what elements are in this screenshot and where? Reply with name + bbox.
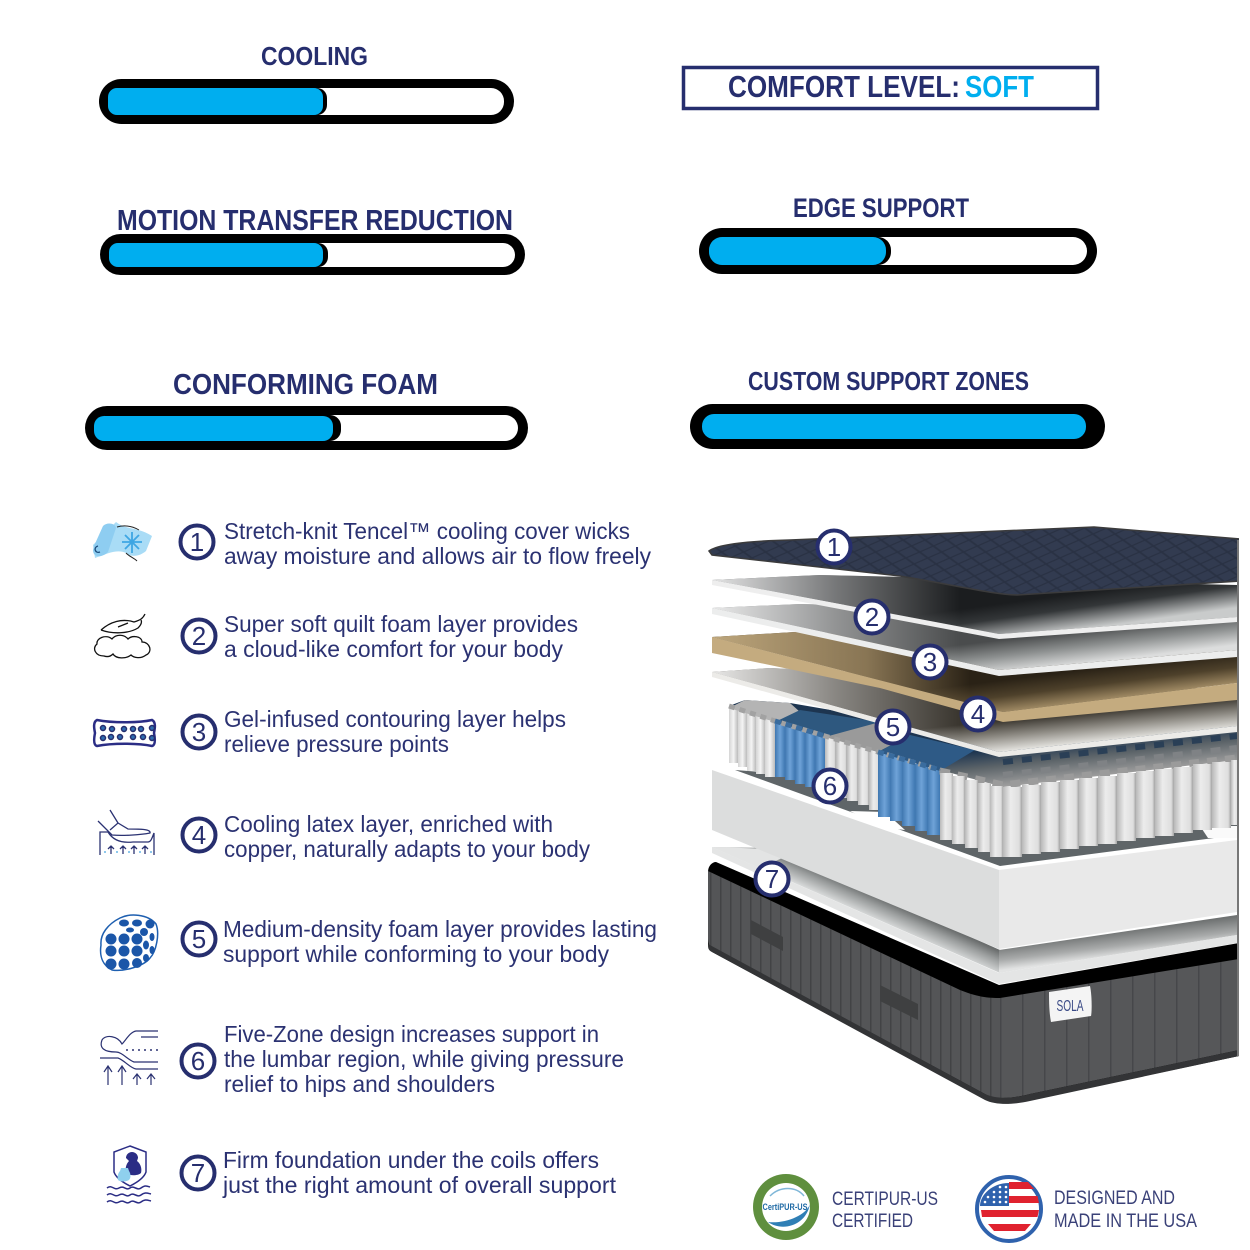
marker 2 [856, 600, 888, 634]
number 2 [182, 620, 216, 652]
comfort level label: COMFORT LEVEL: [728, 69, 960, 104]
comfort level value: SOFT [965, 69, 1034, 104]
coils: middle blue [878, 753, 940, 835]
number 5: 5 [192, 924, 206, 954]
icon: usa flag circle [977, 1177, 1041, 1241]
base layer [708, 862, 1239, 1104]
marker 7: 7 [765, 864, 779, 894]
text 1: away moisture and allows air to flow freely [224, 543, 651, 569]
text 4: copper, naturally adapts to your body [224, 836, 590, 862]
text 7: Firm foundation under the coils offers [223, 1147, 599, 1173]
text: certipur: CERTIPUR-US [832, 1189, 938, 1210]
layer 3 gel foam [712, 604, 1237, 676]
icon: gel foam [94, 720, 155, 746]
marker 5 [876, 710, 910, 744]
layer 7 foundation foam [712, 847, 1237, 984]
text: certipur [832, 1189, 938, 1232]
text 6: the lumbar region, while giving pressure [224, 1046, 624, 1072]
text 3: relieve pressure points [224, 731, 449, 757]
marker 7 [756, 862, 788, 896]
marker 3: 3 [923, 647, 937, 677]
marker 5: 5 [886, 712, 900, 742]
number 1: 1 [190, 527, 204, 557]
text 3 [224, 706, 566, 757]
marker 1: 1 [827, 532, 841, 562]
number 5 [182, 922, 216, 956]
text: usa: DESIGNED AND [1054, 1188, 1175, 1209]
badge: certipur-us [753, 1174, 938, 1240]
text 7: just the right amount of overall support [222, 1172, 617, 1198]
number 6 [182, 1044, 214, 1078]
feature 3 [94, 706, 566, 757]
text 5: support while conforming to your body [223, 941, 609, 967]
number 3: 3 [192, 717, 206, 747]
layer 6 base foam and pocket coils [712, 700, 1239, 949]
text 5: Medium-density foam layer provides lasting [223, 916, 657, 942]
marker 2: 2 [865, 602, 879, 632]
text 2 [224, 611, 578, 662]
text 2: Super soft quilt foam layer provides [224, 611, 578, 637]
marker 6 [814, 770, 846, 802]
feature 5 [101, 915, 657, 970]
text 4 [224, 811, 590, 862]
coils: left blue [775, 722, 825, 790]
mattress cutaway illustration [708, 527, 1240, 1104]
meter: conforming foam [85, 406, 528, 450]
number 6: 6 [191, 1046, 205, 1076]
layer 4 latex [712, 632, 1237, 722]
layer 1 cover [709, 527, 1240, 595]
feature 4 [98, 810, 590, 862]
text 6 [224, 1021, 624, 1097]
text: certipur: CERTIFIED [832, 1211, 913, 1232]
text 6: Five-Zone design increases support in [224, 1021, 599, 1047]
right edge line [1237, 540, 1239, 1056]
marker 4: 4 [971, 699, 985, 729]
icon: certipur seal: CertiPUR-US [762, 1202, 808, 1212]
meter: motion transfer reduction [100, 234, 525, 275]
number 4: 4 [192, 820, 206, 850]
number 7 [182, 1156, 214, 1190]
number 4 [182, 818, 216, 852]
text 5 [223, 916, 657, 967]
meter: custom support zones [690, 404, 1105, 449]
icon: firm foundation [107, 1146, 151, 1203]
marker 1 [818, 530, 850, 564]
brand label [1049, 986, 1092, 1022]
number 1 [180, 526, 214, 558]
icon: cooling cover [93, 522, 152, 561]
coils: left white [729, 706, 775, 777]
number 7: 7 [191, 1158, 205, 1188]
heading: custom support zones: CUSTOM SUPPORT ZONES [748, 366, 1029, 396]
handle left [751, 920, 783, 951]
layer 5 foam [712, 668, 1237, 757]
marker 3 [914, 646, 946, 678]
text 6: relief to hips and shoulders [224, 1071, 495, 1097]
text 4: Cooling latex layer, enriched with [224, 811, 553, 837]
icon: feather and cloud [95, 614, 150, 658]
meter: cooling [99, 79, 514, 124]
comfort level box [684, 68, 1098, 108]
coils: middle white [825, 737, 880, 810]
marker 6: 6 [823, 771, 837, 801]
icon: certipur seal [753, 1174, 819, 1240]
feature 1 [93, 518, 651, 569]
feature 7 [107, 1146, 617, 1203]
text 3: Gel-infused contouring layer helps [224, 706, 566, 732]
bar: motion transfer reduction [100, 205, 525, 275]
text: usa [1054, 1188, 1197, 1232]
text 1 [224, 518, 651, 569]
heading: cooling: COOLING [261, 41, 368, 71]
text 7 [222, 1147, 617, 1198]
feature 2 [95, 611, 578, 662]
layer 2 quilt foam [712, 575, 1237, 639]
heading: edge support: EDGE SUPPORT [793, 193, 969, 223]
icon: foam cells [101, 915, 158, 970]
heading: conforming foam: CONFORMING FOAM [173, 369, 438, 401]
badge: made in usa [977, 1177, 1197, 1241]
text 1: Stretch-knit Tencel™ cooling cover wicks [224, 518, 630, 544]
coil tops [729, 700, 1237, 787]
handle right [880, 985, 918, 1020]
brand label: SOLA [1056, 998, 1084, 1015]
feature 6 [100, 1021, 624, 1097]
text: usa: MADE IN THE USA [1054, 1211, 1197, 1232]
meter: edge support [699, 228, 1097, 274]
number 3 [182, 716, 216, 748]
marker 4 [962, 698, 994, 730]
coils: front row [940, 760, 1239, 857]
bar: conforming foam [85, 369, 528, 450]
text 2: a cloud-like comfort for your body [224, 636, 563, 662]
bar: custom support zones [690, 366, 1105, 449]
heading: motion transfer reduction: MOTION TRANSFER REDUCTION [117, 205, 513, 237]
number 2: 2 [192, 621, 206, 651]
icon: five zone support [100, 1031, 158, 1085]
bar: cooling [99, 41, 514, 124]
bar: edge support [699, 193, 1097, 274]
icon: latex adapts [98, 810, 154, 855]
